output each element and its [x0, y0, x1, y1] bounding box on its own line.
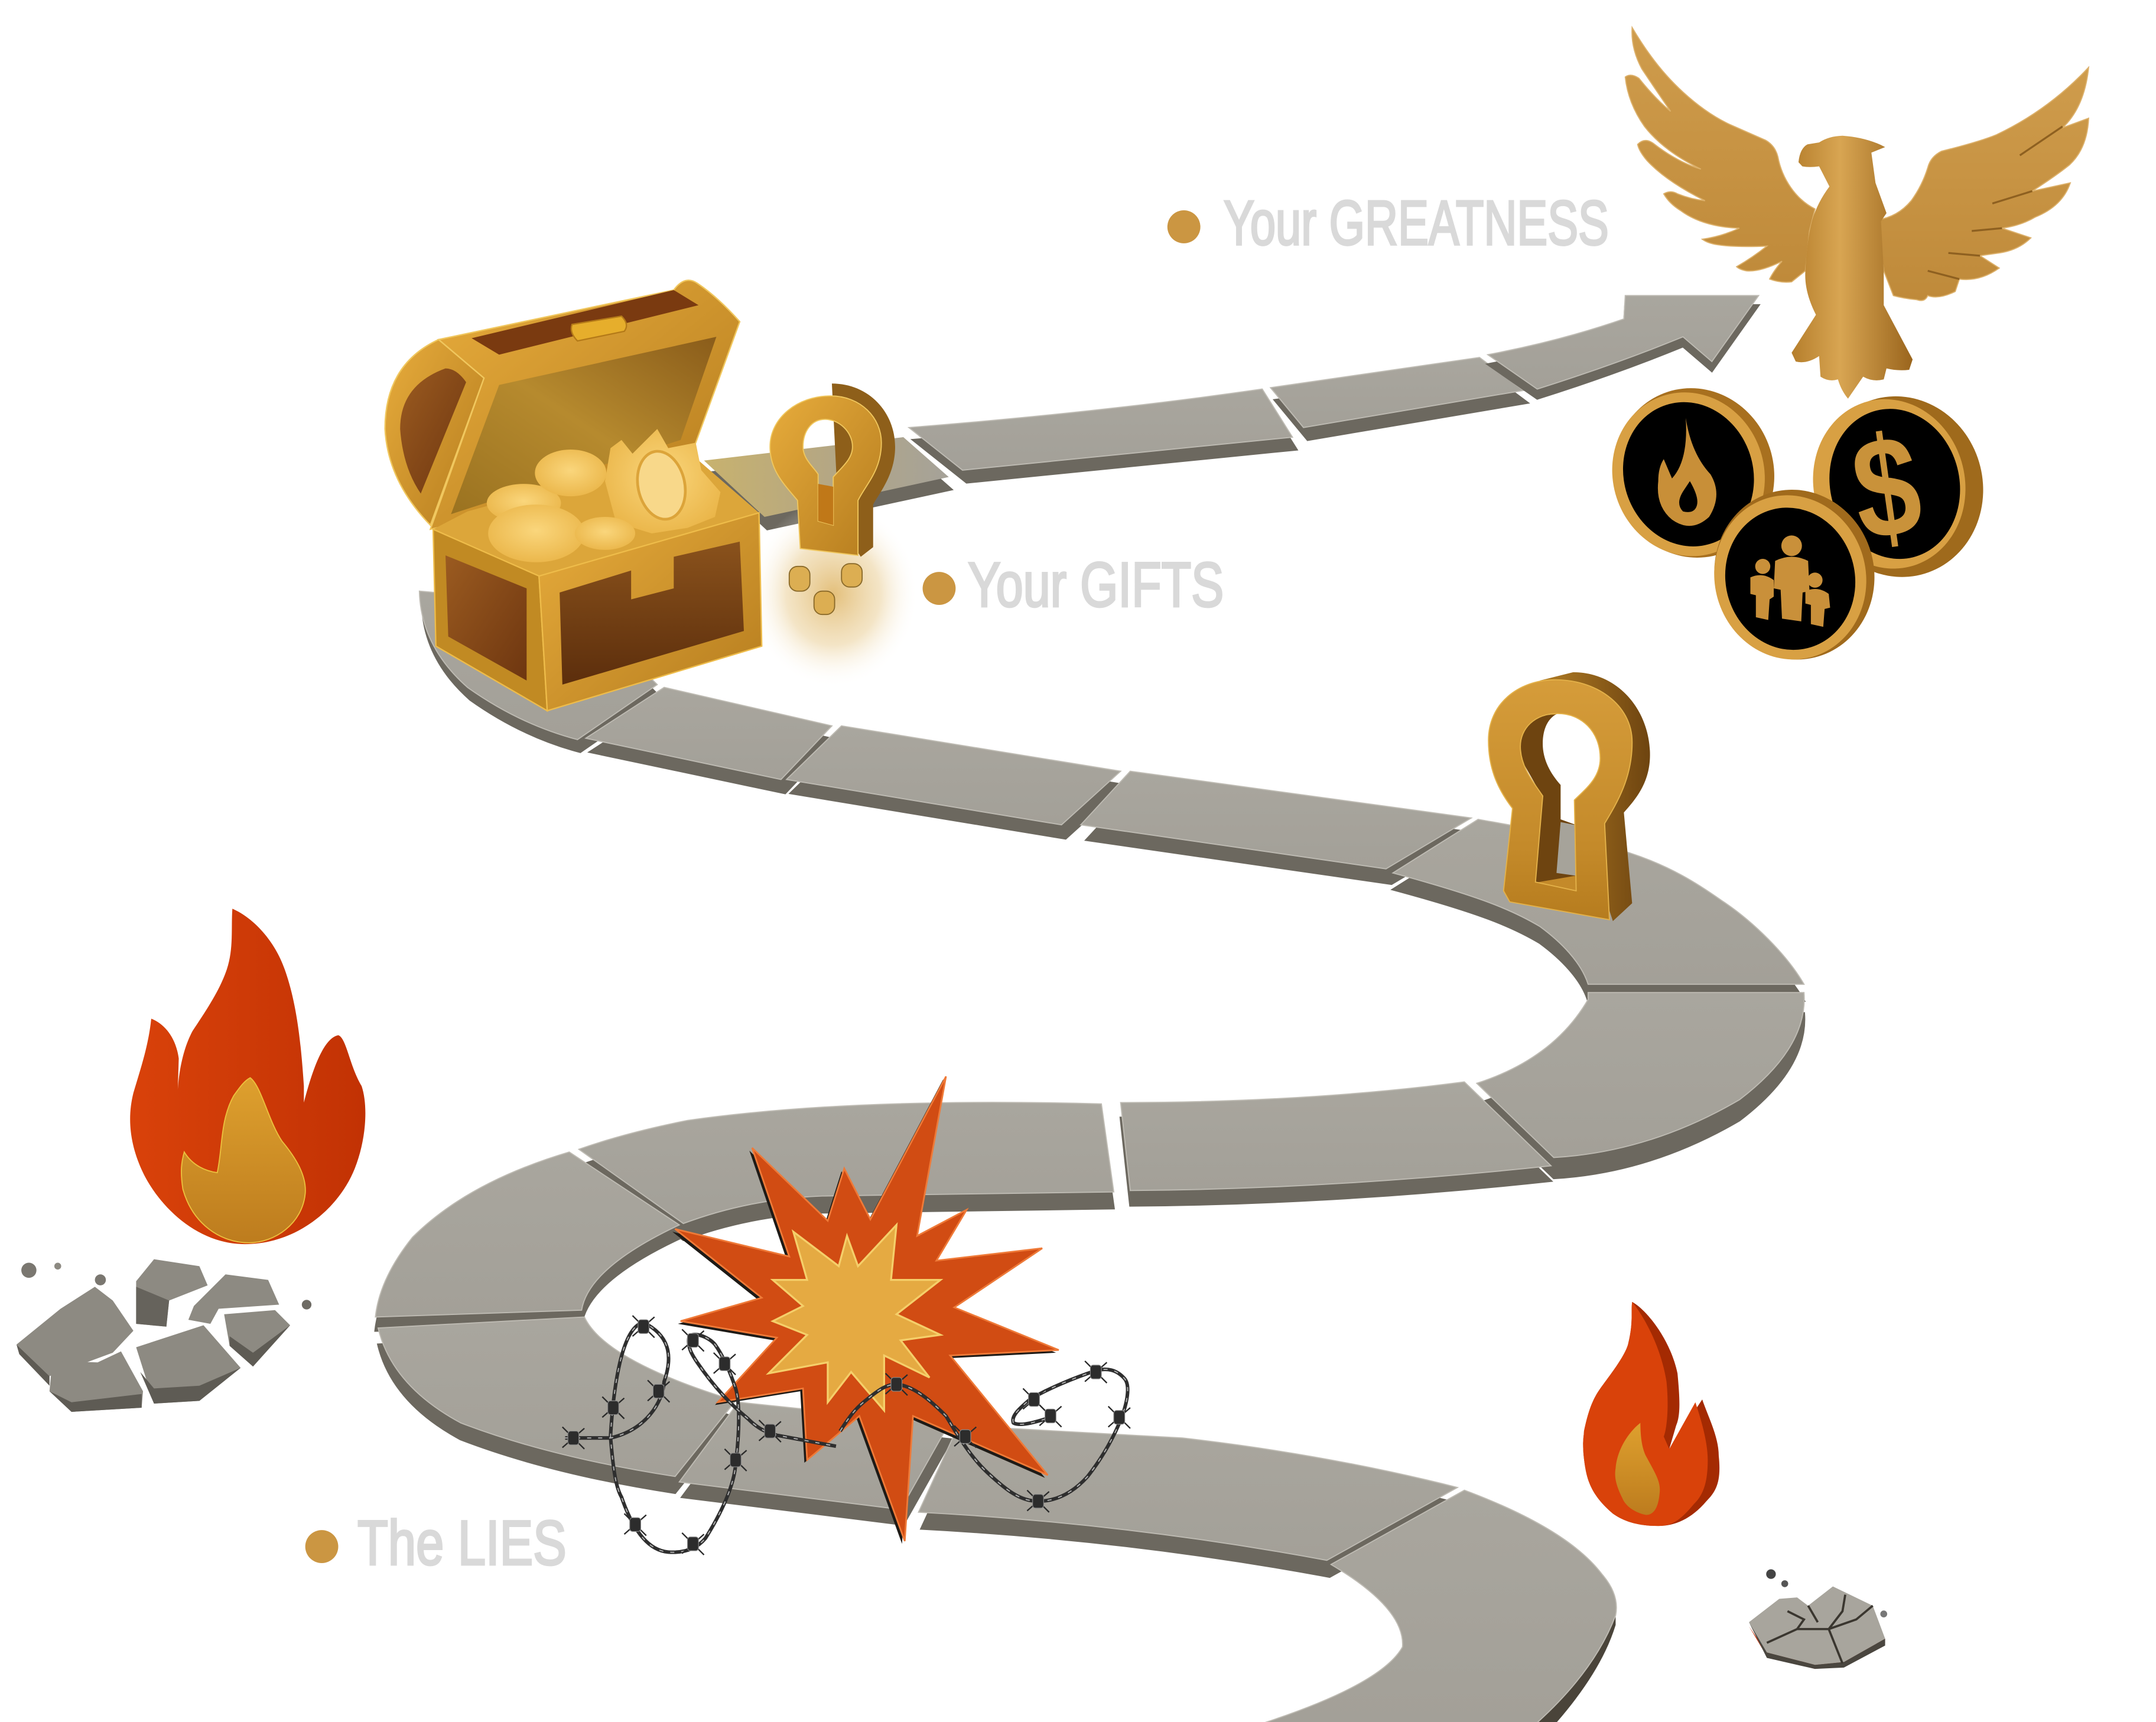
- icon: small flame: [1583, 1302, 1719, 1526]
- small gold coins: [789, 564, 862, 614]
- coin: dollar: [1795, 378, 2002, 595]
- chest interior fill: [433, 451, 759, 576]
- key hole opening: [1543, 714, 1601, 825]
- small keyhole slot: [818, 484, 833, 525]
- right wing feather creases: [1928, 126, 2063, 279]
- icon: orange explosion star: [672, 1076, 1059, 1544]
- road tile 2: [586, 688, 836, 793]
- road tile 5: upper right curve: [1393, 819, 1804, 1001]
- label: Your GIFTS: [923, 549, 1224, 620]
- winding stone road: [375, 295, 1804, 1722]
- icon: cracked stone rubble right: [1749, 1569, 1887, 1669]
- chest lid side hinge: [385, 340, 484, 525]
- label: Your GREATNESS: Your GREATNESS: [1224, 187, 1609, 258]
- road tile 16: [1270, 357, 1527, 440]
- road tile 6: lower right curve: [1477, 992, 1804, 1178]
- gold glow under small keyhole: [748, 500, 919, 688]
- road tile 8: [579, 1102, 1114, 1240]
- icon: barbed wire: [562, 1316, 1130, 1555]
- road tile 7: [1121, 1082, 1551, 1206]
- key inner depth: [1520, 715, 1603, 894]
- label: The LIES: The LIES: [357, 1507, 567, 1578]
- road tile 3: [786, 726, 1125, 839]
- road seen through slot: [1556, 822, 1576, 875]
- icon: large flame: [130, 909, 365, 1244]
- label: The LIES: [305, 1507, 567, 1578]
- explosion gold centre: [769, 1225, 941, 1411]
- road tile 11: [679, 1402, 951, 1525]
- chest left face: [433, 529, 547, 711]
- road tile 14: upper straight behind chest: [704, 437, 951, 529]
- coin: flame: [1591, 367, 1796, 578]
- coin: dollar: $: [1843, 403, 1930, 571]
- icon: broken stone rubble left: [17, 1259, 311, 1412]
- chest lid frame: [430, 280, 740, 529]
- chest front face: [539, 513, 762, 711]
- road tile 9: left curve: [375, 1152, 679, 1331]
- key slot floor: [1536, 875, 1576, 891]
- key front face: [1488, 680, 1632, 920]
- label: Your GREATNESS: [1168, 187, 1609, 258]
- icon: small keyhole: [770, 383, 895, 614]
- body and head: [1791, 136, 1913, 399]
- road tile 12: [919, 1425, 1460, 1577]
- icon: treasure chest: [385, 280, 762, 711]
- coin: family: [1696, 473, 1892, 676]
- key extrusion: [1540, 672, 1650, 921]
- road tile 4: [1081, 772, 1477, 884]
- chest treasure: [487, 429, 720, 562]
- left wing: [1625, 28, 1815, 282]
- label: Your GIFTS: Your GIFTS: [968, 549, 1224, 620]
- icons: gold coins: [1591, 367, 2002, 676]
- arrow tile: [1488, 295, 1758, 399]
- icon: golden phoenix: [1625, 28, 2089, 399]
- road tile 15: [909, 389, 1297, 483]
- road tile 13: bottom curve: [1265, 1490, 1617, 1722]
- right wing: [1877, 67, 2089, 301]
- road tile: chest curve: [420, 591, 660, 752]
- road tile 10: [378, 1317, 736, 1493]
- icon: large keyhole: [1488, 672, 1650, 921]
